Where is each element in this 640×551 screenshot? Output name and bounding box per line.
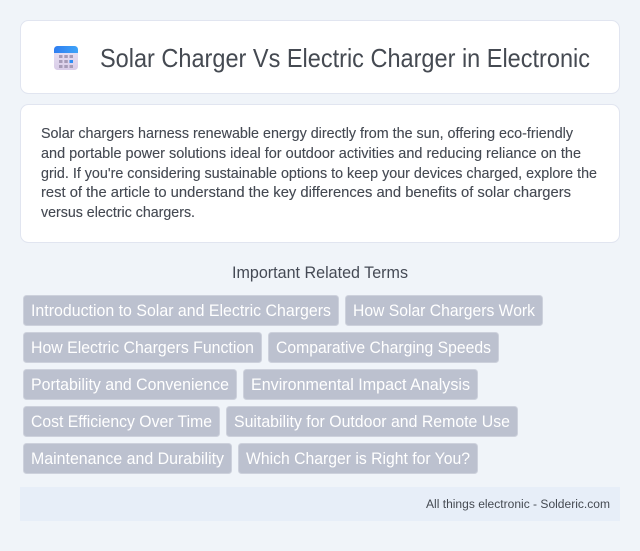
tag: Introduction to Solar and Electric Chargers [31, 302, 331, 320]
tag: Cost Efficiency Over Time [31, 413, 212, 431]
icon: calendar [54, 46, 78, 70]
tag: Environmental Impact Analysis [251, 376, 470, 394]
heading: related terms: Important Related Terms [232, 264, 408, 282]
tag [24, 444, 232, 474]
tag [24, 332, 262, 362]
tag [268, 332, 498, 362]
tag [346, 296, 542, 326]
tag: Maintenance and Durability [31, 450, 225, 468]
tag: Comparative Charging Speeds [276, 339, 491, 357]
tag [238, 444, 478, 474]
text block: intro paragraph: Solar chargers harness renewable energy directly from the sun, offering eco-friendly [41, 126, 574, 142]
text block: intro paragraph: grid. If you're considering sustainable options to keep your devices charged, explore the [41, 166, 597, 182]
tag [24, 296, 338, 326]
tag: How Electric Chargers Function [31, 339, 254, 357]
text block: intro paragraph: versus electric chargers. [41, 205, 195, 221]
footer [20, 487, 620, 521]
tag: Portability and Convenience [31, 376, 229, 394]
text block: intro paragraph [41, 126, 597, 221]
tag [24, 370, 236, 400]
tag: How Solar Chargers Work [353, 302, 536, 320]
tag [226, 406, 518, 436]
tag: Suitability for Outdoor and Remote Use [234, 413, 510, 431]
tag [244, 370, 478, 400]
text block: intro paragraph: rest of the article to understand the key differences and benefits of solar chargers [41, 185, 571, 201]
text block: intro paragraph: and portable power solutions ideal for outdoor activities and reducing reliance on the [41, 146, 581, 162]
tag [24, 406, 220, 436]
tag: Which Charger is Right for You? [246, 450, 470, 468]
title: Solar Charger Vs Electric Charger in Electronic [100, 43, 590, 73]
panel: intro text [20, 104, 620, 242]
tag list [24, 296, 542, 474]
footer: All things electronic - Solderic.com [426, 497, 610, 511]
panel: header [20, 20, 620, 94]
